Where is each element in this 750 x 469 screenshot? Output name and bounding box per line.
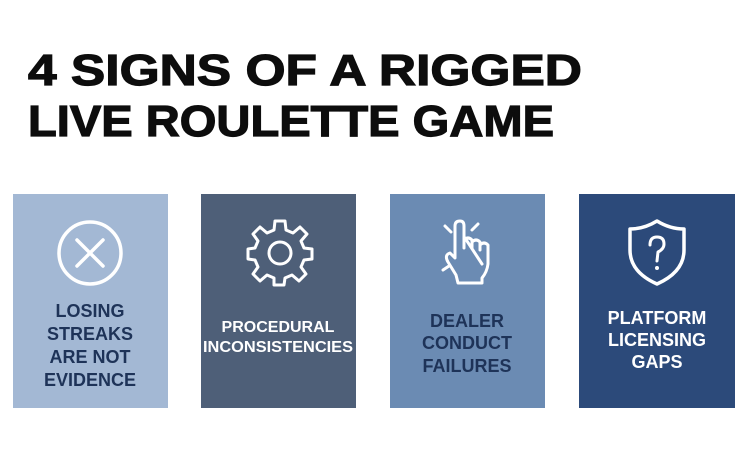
text: procedural: INCONSISTENCIES [203,339,353,356]
panel: procedural [201,194,356,408]
text: platform: GAPS [631,352,683,372]
panel: platform [579,194,735,408]
text: dealer: FAILURES [422,356,512,376]
icon: x circle [59,222,121,284]
text: losing streaks: LOSING [55,301,125,321]
title [28,46,582,146]
panel: losing streaks [13,194,168,408]
text: procedural [203,319,353,356]
text: losing streaks [44,301,136,390]
icon: hand [443,221,488,283]
title: 4 SIGNS OF A RIGGED [28,46,582,95]
text: procedural: PROCEDURAL [222,319,335,336]
text: dealer: DEALER [430,311,504,331]
text: platform: PLATFORM [608,308,706,328]
panel: dealer [390,194,545,408]
icon: gear [248,221,312,285]
icon: shield question [630,221,684,284]
text: dealer: CONDUCT [422,333,512,353]
title: LIVE ROULETTE GAME [28,97,554,146]
text: losing streaks: ARE NOT [50,347,131,367]
text: platform [608,308,706,372]
text: losing streaks: EVIDENCE [44,370,136,390]
text: losing streaks: STREAKS [47,324,133,344]
text: dealer [422,311,512,376]
text: platform: LICENSING [608,330,706,350]
